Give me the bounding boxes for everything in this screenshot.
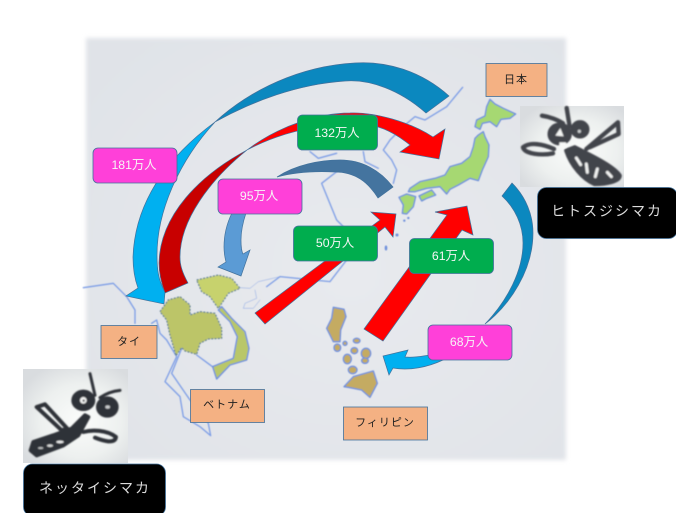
label: フィリピン: フィリピン: [355, 416, 415, 429]
label: タイ: [101, 326, 157, 358]
label: 95万人: [218, 179, 302, 214]
label: タイ: タイ: [117, 335, 141, 348]
arrow: 95万人 light blue head: [218, 213, 250, 276]
label: 61万人: 61万人: [432, 249, 470, 263]
Thailand, Laos, Vietnam: [160, 275, 249, 379]
label: 68万人: 68万人: [450, 335, 488, 349]
label: フィリピン: [344, 407, 428, 440]
Philippines: [327, 307, 377, 397]
label: 181万人: [93, 148, 177, 183]
label: 68万人: [428, 325, 512, 360]
arrow: 132万人 dark red tail: [159, 150, 247, 293]
arrow: 68万人 dark blue part: [485, 183, 533, 324]
label: 50万人: [294, 226, 378, 261]
label: 日本: 日本: [504, 72, 528, 86]
icon: ヒトスジシマカ mosquito drawing: [520, 106, 624, 187]
arrow: 181万人 Japan to Thailand, upper part: [215, 63, 449, 122]
label: ヒトスジシマカ: [538, 188, 676, 238]
map background panel: [86, 38, 566, 460]
label: ネッタイシマカ: ネッタイシマカ: [39, 480, 151, 496]
label: ベトナム: [190, 390, 264, 422]
label: 50万人: 50万人: [316, 236, 354, 250]
Japan: [399, 99, 516, 222]
arrow: 95万人 dark blue part: [277, 160, 393, 198]
label: ネッタイシマカ: [24, 464, 166, 513]
label: ヒトスジシマカ: ヒトスジシマカ: [551, 203, 663, 219]
label: 日本: [486, 64, 547, 96]
label: ベトナム: ベトナム: [203, 398, 251, 411]
icon: ネッタイシマカ mosquito drawing: [23, 369, 128, 463]
Ryukyu islands: [385, 234, 398, 250]
label: 95万人: 95万人: [240, 189, 278, 203]
arrow: 181万人 cyan head: [126, 122, 215, 304]
arrow: 68万人 cyan head: [383, 350, 443, 375]
label: 181万人: 181万人: [111, 158, 157, 172]
label: 132万人: [298, 115, 378, 150]
arrow: 132万人 red head: [247, 113, 445, 159]
map of East and Southeast Asia: [83, 87, 516, 436]
coastlines: [83, 87, 463, 436]
label: 132万人: 132万人: [314, 126, 360, 140]
arrow: 50万人 red: [255, 212, 396, 324]
arrow: 61万人 red: [364, 206, 473, 341]
label: 61万人: [410, 238, 494, 274]
